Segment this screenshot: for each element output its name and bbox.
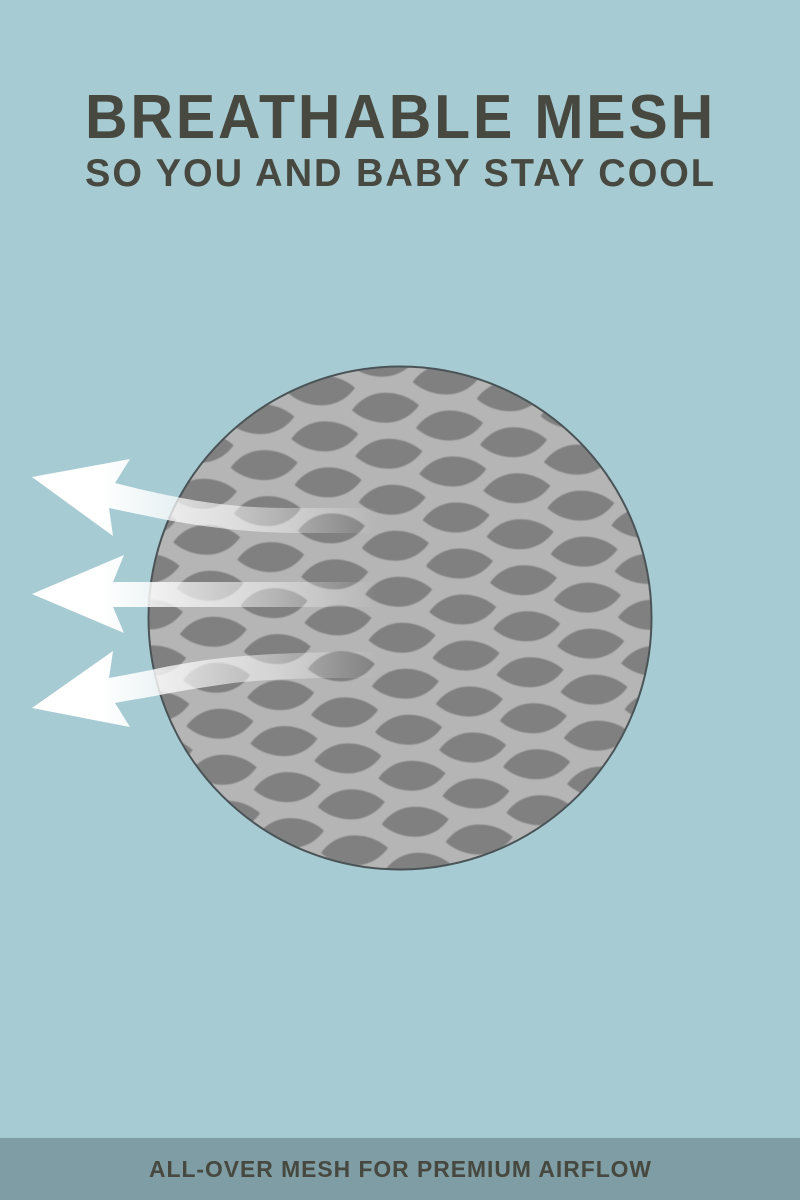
arrow 1 (32, 459, 378, 536)
arrow 3 (32, 651, 378, 727)
arrow 2 (32, 555, 400, 633)
title (85, 82, 716, 195)
airflow arrows (32, 459, 400, 727)
footer bar (0, 1138, 800, 1200)
mesh holes (150, 368, 650, 868)
footer text: ALL-OVER MESH FOR PREMIUM AIRFLOW (149, 1156, 652, 1182)
subheading: SO YOU AND BABY STAY COOL (85, 152, 716, 195)
heading: breathable mesh: BREATHABLE MESH (85, 82, 716, 152)
mesh circle (148, 366, 652, 870)
